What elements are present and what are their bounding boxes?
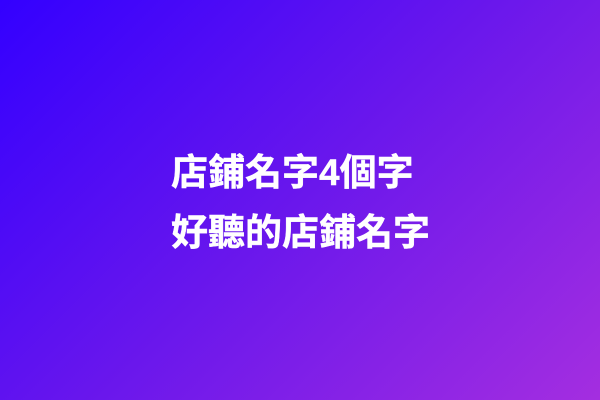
title: [171, 152, 430, 253]
title line 2: 好聽的店鋪名字: [171, 212, 430, 253]
title line 1: 店鋪名字4個字: [171, 152, 414, 193]
